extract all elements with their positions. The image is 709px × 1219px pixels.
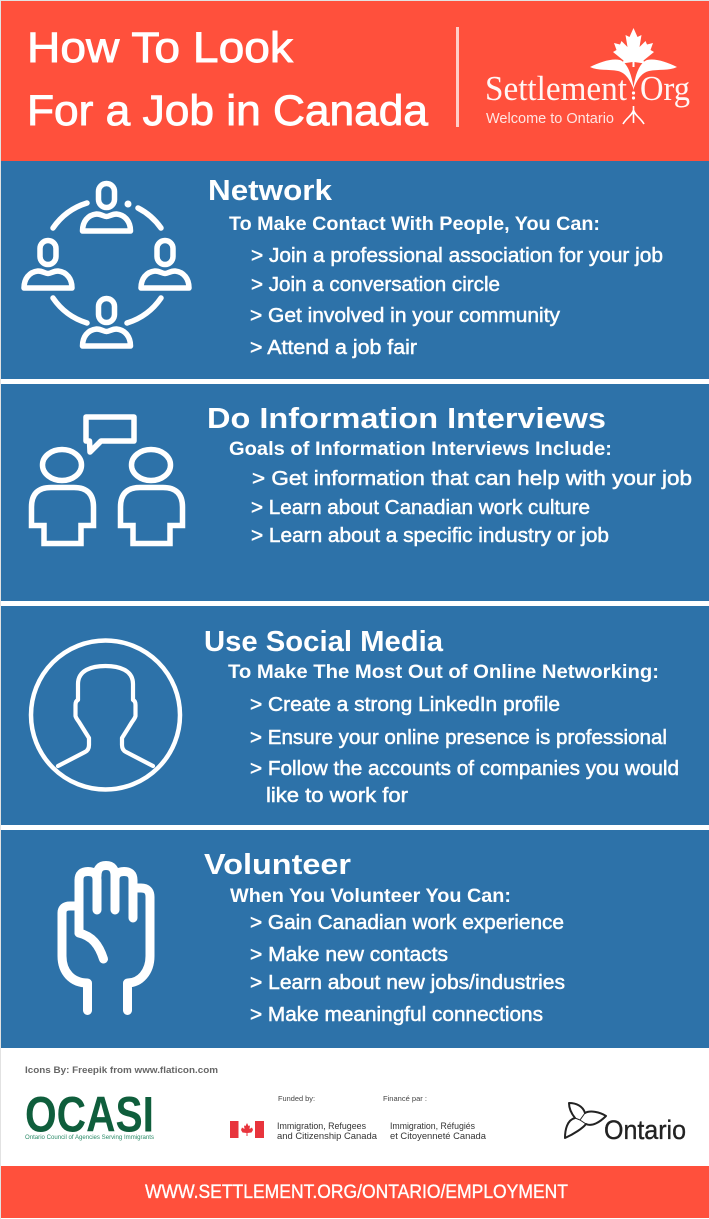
logo: Ontario [565,1103,686,1145]
panel: volunteer [1,830,709,1048]
list: > Get involved in your community [250,305,560,327]
panel: network [1,161,709,379]
list: > Gain Canadian work experience [250,912,564,934]
funders block: Immigration, Réfugiés [390,1121,475,1132]
icon: Canadian flag [230,1121,264,1138]
subheading: Goals of Information Interviews Include: [229,438,612,460]
title: How To Look [27,24,294,72]
funders block: Financé par : [383,1094,427,1103]
list: > Create a strong LinkedIn profile [250,694,560,716]
logo: Settlement.Org: Org [640,69,690,108]
heading: Use Social Media [204,626,444,658]
funders block: Immigration, Refugees [277,1121,366,1132]
list: > Attend a job fair [250,337,417,359]
list [250,694,679,807]
website url: WWW.SETTLEMENT.ORG/ONTARIO/EMPLOYMENT [145,1182,568,1203]
heading: Volunteer [204,849,351,881]
list: > Ensure your online presence is professional [250,727,667,749]
panel: social media [1,606,709,825]
logo: Settlement.Org: Welcome to Ontario [486,110,614,127]
icon credit: Icons By: Freepik from www.flaticon.com [25,1065,218,1076]
list: > Follow the accounts of companies you would [250,758,679,780]
icon: two people talking [32,417,182,544]
heading: Do Information Interviews [207,403,606,435]
subheading: To Make Contact With People, You Can: [229,213,600,235]
list: > Join a conversation circle [251,274,500,296]
footer banner [1,1166,709,1218]
heading: Network [208,175,333,207]
list: > Make meaningful connections [250,1004,543,1026]
list: like to work for [266,785,408,807]
logo: Settlement.Org [485,28,690,127]
icon: raised hand [62,866,150,1010]
logo: Ontario: Ontario [604,1115,686,1145]
list: > Learn about Canadian work culture [251,497,590,519]
list: > Learn about new jobs/industries [250,972,565,994]
list: > Make new contacts [250,944,448,966]
subheading: When You Volunteer You Can: [230,885,511,907]
funders block: Funded by: [278,1094,315,1103]
funders block: et Citoyenneté Canada [390,1131,487,1142]
list: > Join a professional association for your job [251,245,663,267]
funders block [230,1094,487,1142]
title [27,24,428,135]
list [250,245,663,359]
header banner [1,1,709,161]
panel: information interviews [1,384,709,601]
icon: network of people [24,184,189,346]
funders block: and Citizenship Canada [277,1131,378,1142]
list: > Learn about a specific industry or job [251,525,609,547]
list: > Get information that can help with your job [252,468,692,490]
list [250,912,565,1026]
logo: OCASI: Ontario Council of Agencies Serving Immigrants [25,1135,154,1141]
logo: OCASI: OCASI [25,1086,154,1142]
subheading: To Make The Most Out of Online Networking: [228,661,659,683]
title: For a Job in Canada [27,87,428,135]
list [251,468,692,547]
icon: profile silhouette [31,640,180,790]
logo: Settlement.Org: Settlement [485,69,627,108]
